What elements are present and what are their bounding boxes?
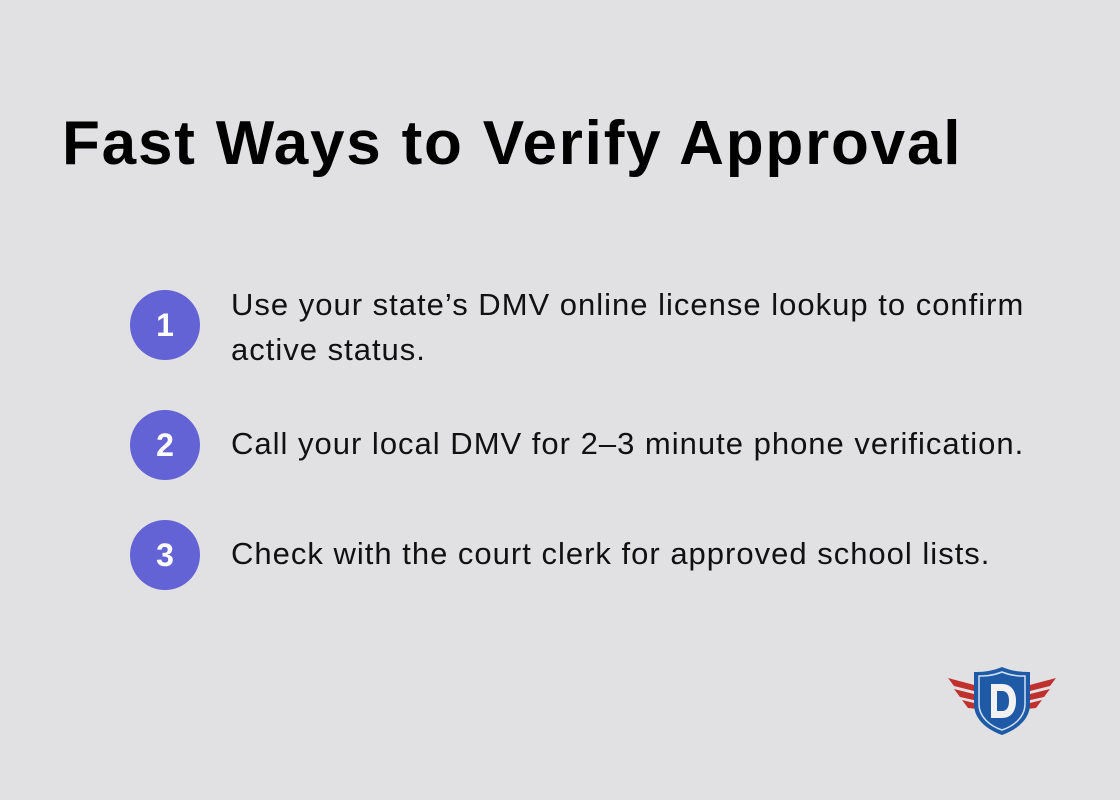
step 2 number: 2 bbox=[156, 427, 174, 463]
icon: logo shield with wings bbox=[948, 667, 1056, 735]
step 2 text: Call your local DMV for 2–3 minute phone verification. bbox=[231, 426, 1024, 461]
step 1 text: Use your state’s DMV online license lookup to confirm bbox=[231, 287, 1024, 322]
step 2 number bbox=[130, 410, 200, 480]
step 1 number: 1 bbox=[156, 307, 174, 343]
step 3 number bbox=[130, 520, 200, 590]
step 1 text bbox=[231, 287, 1024, 367]
step 3 text: Check with the court clerk for approved school lists. bbox=[231, 536, 990, 571]
step 1 number bbox=[130, 290, 200, 360]
title: Fast Ways to Verify Approval bbox=[62, 109, 962, 178]
step 1 text: active status. bbox=[231, 332, 426, 367]
step 3 number: 3 bbox=[156, 537, 174, 573]
